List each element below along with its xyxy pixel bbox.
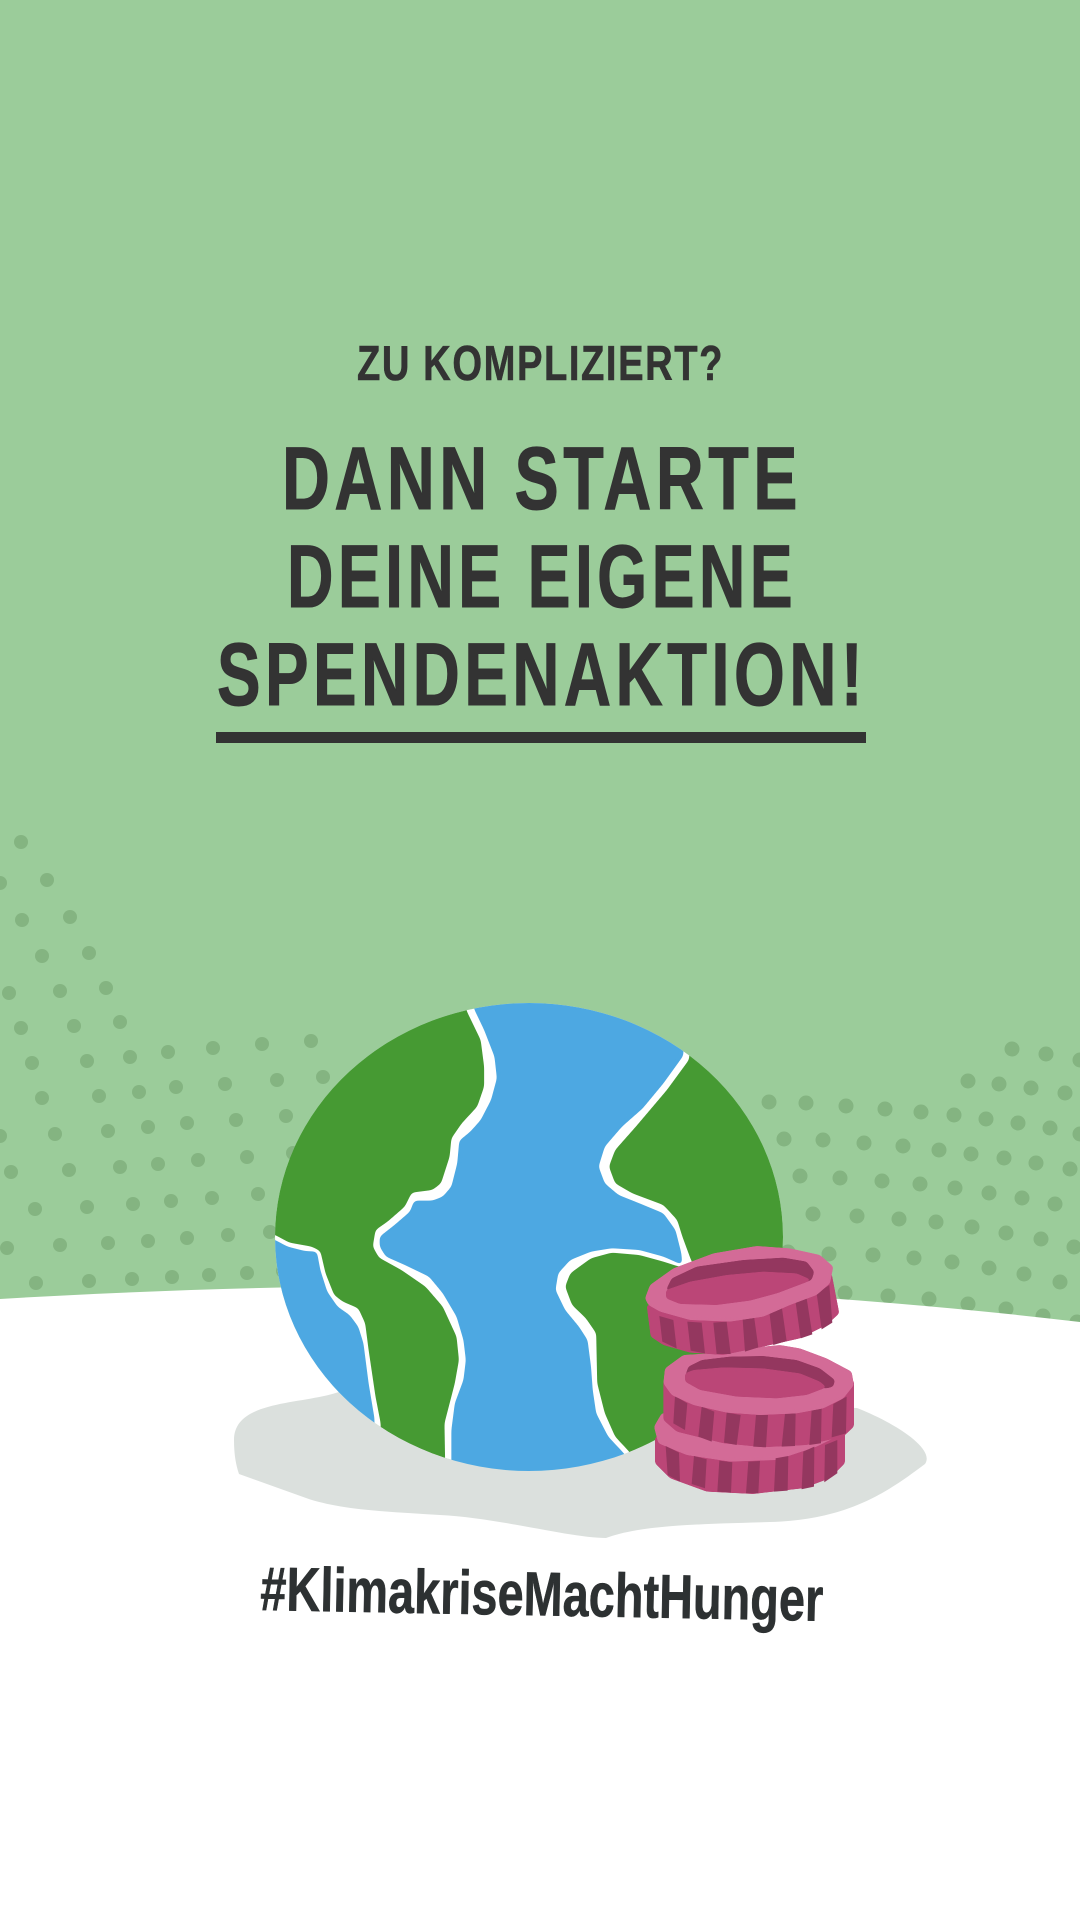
southwest ocean [275, 1240, 374, 1423]
icon: globe [275, 1003, 783, 1471]
central ocean [380, 1003, 684, 1471]
central ocean outline [373, 1003, 692, 1471]
heading: SPENDENAKTION! [217, 624, 867, 724]
southwest ocean outline [275, 1235, 381, 1427]
globe land [275, 1003, 783, 1471]
top coin [645, 1246, 839, 1355]
white ground [0, 1285, 1080, 1920]
middle coin [663, 1345, 854, 1447]
heading: DANN STARTE [282, 428, 802, 528]
bottom coin [654, 1403, 845, 1494]
green background panel [0, 0, 1080, 1340]
dot pattern [0, 835, 1080, 1330]
heading underline [216, 732, 866, 743]
hashtag: #KlimakriseMachtHunger [260, 1555, 824, 1635]
heading: DEINE EIGENE [287, 526, 797, 626]
ground shadow [234, 1392, 927, 1538]
kicker: question: ZU KOMPLIZIERT? [357, 337, 724, 391]
heading [217, 428, 867, 724]
icon: coin stack [645, 1246, 854, 1494]
